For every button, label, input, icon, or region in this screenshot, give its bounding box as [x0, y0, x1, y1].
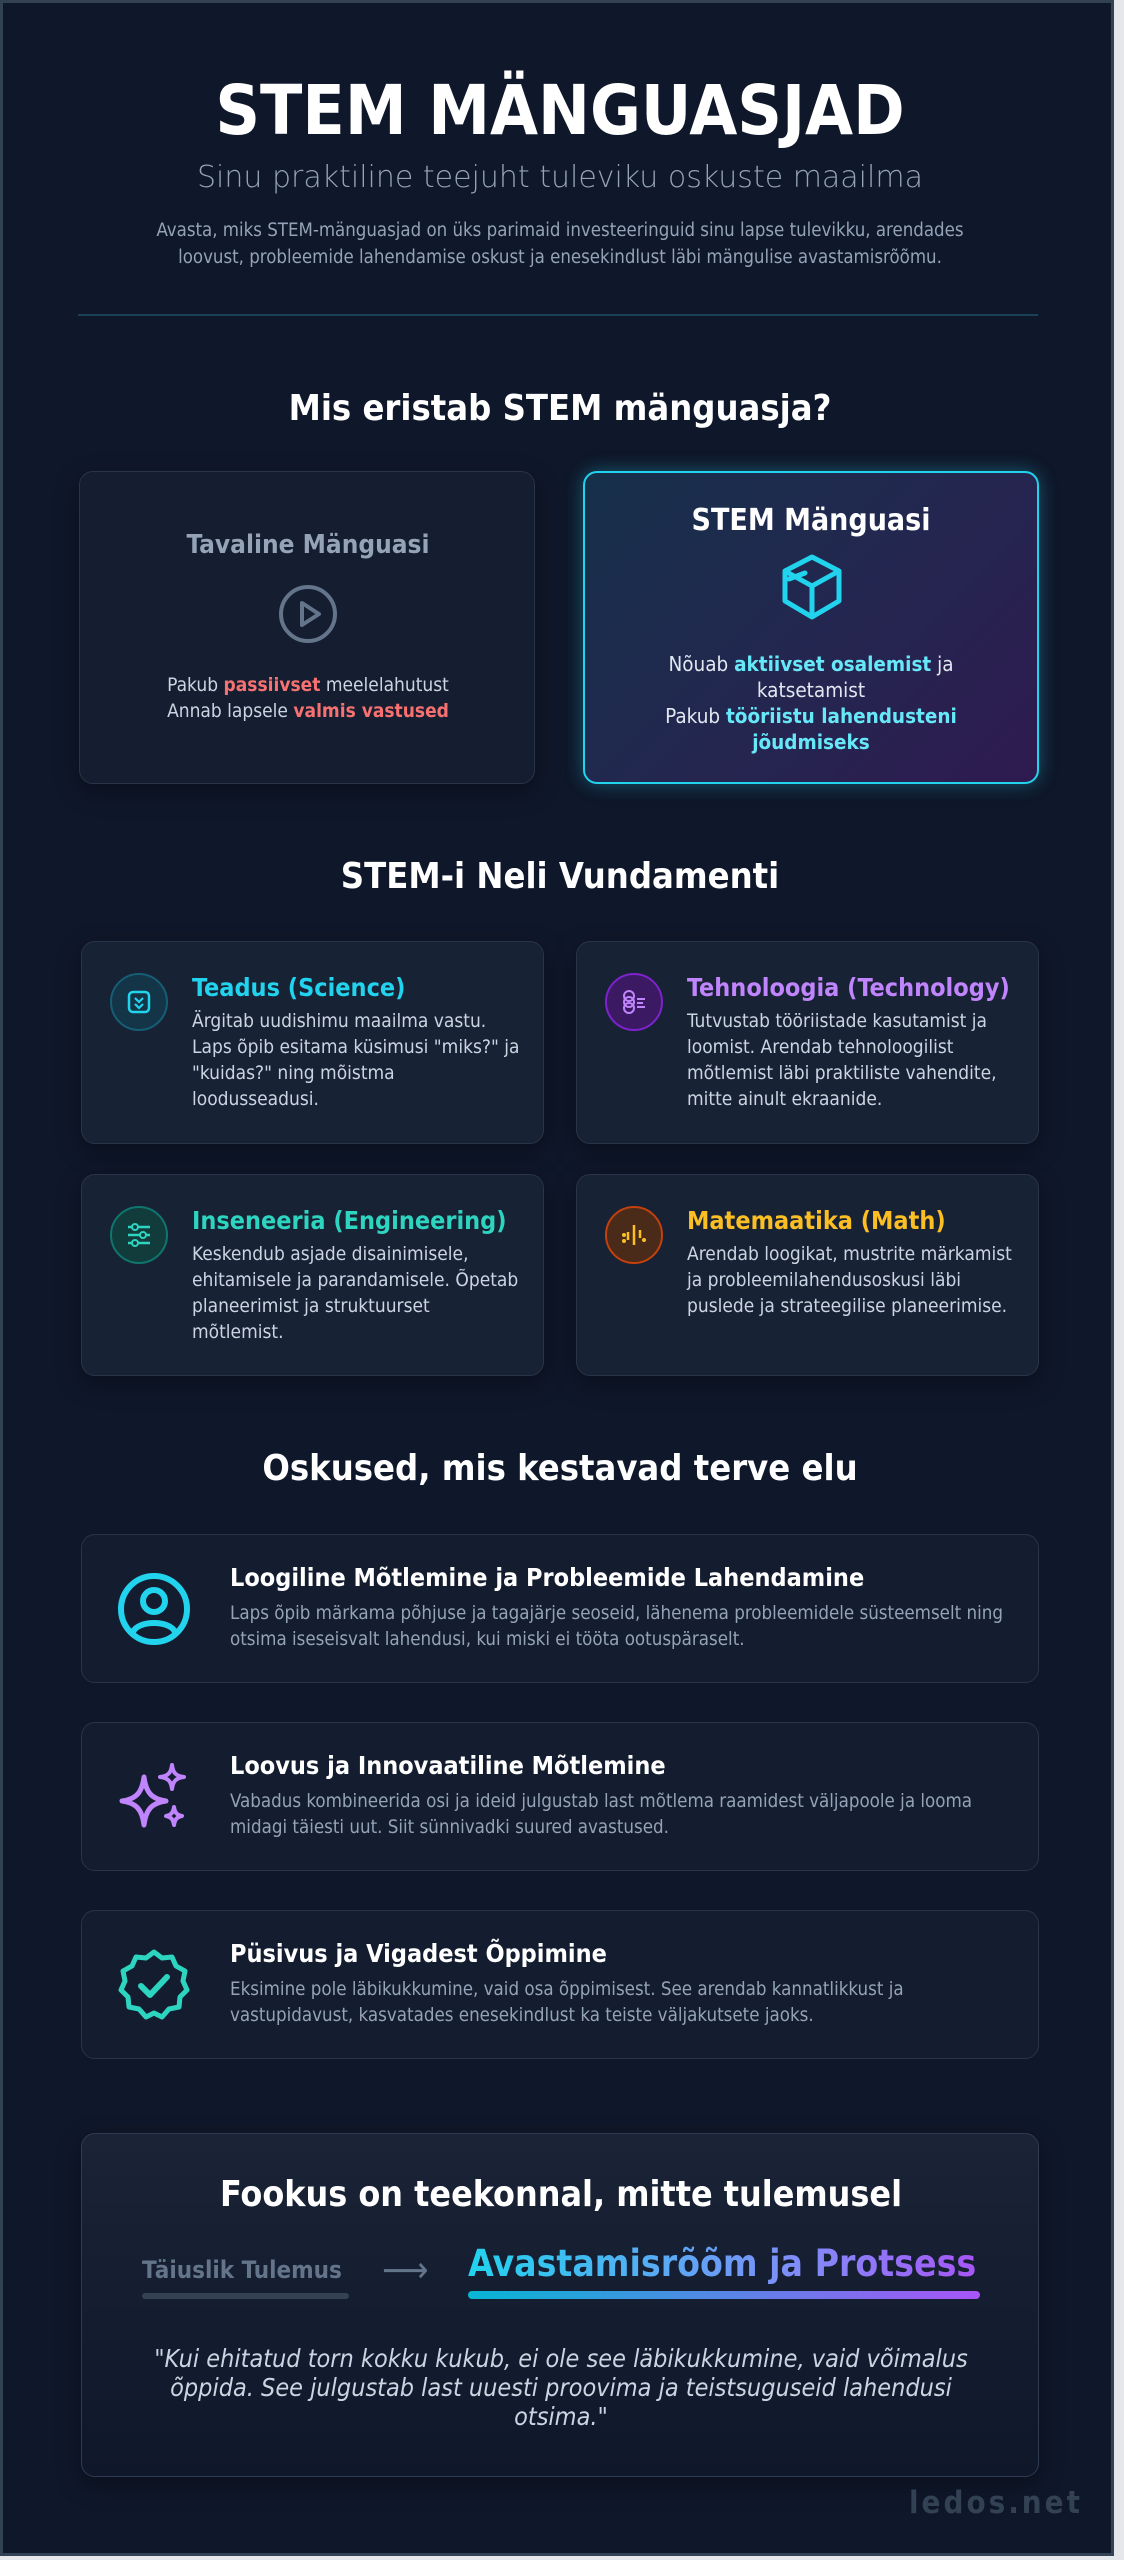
- panel: creativity: [81, 1722, 1039, 1871]
- text: regular toy: Pakub passiivset meelelahutust: [167, 674, 449, 696]
- icon: science: [110, 973, 168, 1031]
- panel: regular toy: [79, 471, 535, 784]
- text: regular toy: Annab lapsele valmis vastused: [167, 700, 449, 722]
- text: perseverance: Eksimine pole läbikukkumine, vaid osa õppimisest. See arendab kannatlikkust ja vastupidavust, kasvatades enesekindlust ka teiste väljakutsete jaoks.: [230, 1979, 904, 2026]
- quote: "Kui ehitatud torn kokku kukub, ei ole see läbikukkumine, vaid võimalus õppida. See julgustab last uuesti proovima ja teistsuguseid lahendusi otsima.": [154, 2344, 968, 2431]
- text: STEM toy: [665, 652, 957, 754]
- label: perfect result: Täiuslik Tulemus: [142, 2256, 342, 2284]
- title: science: Teadus (Science): [192, 973, 405, 1002]
- title: creativity: Loovus ja Innovaatiline Mõtlemine: [230, 1751, 666, 1780]
- panel: perseverance: [81, 1910, 1039, 2059]
- heading: regular toy: Tavaline Mänguasi: [187, 530, 429, 560]
- icon: technology: [605, 973, 663, 1031]
- heading: lifelong skills: Oskused, mis kestavad terve elu: [262, 1448, 858, 1489]
- icon: badge check: [118, 1950, 190, 2020]
- panel: STEM toy: [583, 471, 1039, 784]
- panel: math: [576, 1174, 1039, 1376]
- subtitle: Sinu praktiline teejuht tuleviku oskuste maailma: [197, 160, 923, 195]
- title: technology: Tehnoloogia (Technology): [687, 973, 1010, 1002]
- arrow: ⟶: [382, 2250, 428, 2291]
- label: joy of discovery: Avastamisrõõm ja Protsess: [468, 2242, 976, 2285]
- panel: technology: [576, 941, 1039, 1144]
- icon: cube: [782, 554, 842, 620]
- heading: foundations: STEM-i Neli Vundamenti: [341, 856, 779, 897]
- intro text: Avasta, miks STEM-mänguasjad on üks parimaid investeeringuid sinu lapse tulevikku, arendades loovust, probleemide lahendamise oskust ja enesekindlust läbi mängulise avastamisrõõmu.: [156, 220, 964, 268]
- panel: science: [81, 941, 544, 1144]
- heading: STEM toy: STEM Mänguasi: [692, 503, 930, 538]
- icon: math: [605, 1206, 663, 1264]
- panel: engineering: [81, 1174, 544, 1376]
- panel: focus on journey: [81, 2133, 1039, 2477]
- title: STEM MÄNGUASJAD: [215, 71, 905, 151]
- icon: engineering: [110, 1206, 168, 1264]
- text: STEM toy: Pakub tööriistu lahendusteni jõudmiseks: [665, 704, 957, 754]
- text: creativity: Vabadus kombineerida osi ja ideid julgustab last mõtlema raamidest väljapoole ja looma midagi täiesti uut. Siit sünnivadki suured avastused.: [230, 1791, 972, 1838]
- icon: user: [118, 1573, 190, 1645]
- text: regular toy: [167, 674, 449, 722]
- text: logical thinking: Laps õpib märkama põhjuse ja tagajärje seoseid, lähenema probleemidele süsteemselt ning otsima iseseisvalt lahendusi, kui miski ei tööta ootuspäraselt.: [230, 1603, 1003, 1650]
- heading: focus: Fookus on teekonnal, mitte tulemusel: [220, 2174, 902, 2215]
- panel: logical thinking: [81, 1534, 1039, 1683]
- text: engineering: Keskendub asjade disainimisele, ehitamisele ja parandamisele. Õpetab planeerimist ja struktuurset mõtlemist.: [192, 1243, 518, 1343]
- title: logical thinking: Loogiline Mõtlemine ja Probleemide Lahendamine: [230, 1563, 864, 1592]
- label: perfect result: [142, 2256, 349, 2299]
- text: STEM toy: Nõuab aktiivset osalemist ja katsetamist: [668, 652, 954, 702]
- text: science: Ärgitab uudishimu maailma vastu. Laps õpib esitama küsimusi "miks?" ja "kuidas?" ning mõistma loodusseadusi.: [192, 1010, 519, 1110]
- watermark: ledos.net: [909, 2485, 1083, 2521]
- title: math: Matemaatika (Math): [687, 1206, 946, 1235]
- title: perseverance: Püsivus ja Vigadest Õppimine: [230, 1939, 607, 1968]
- text: math: Arendab loogikat, mustrite märkamist ja probleemilahendusoskusi läbi puslede ja strateegilise planeerimise.: [687, 1243, 1012, 1317]
- icon: sparkles: [120, 1763, 186, 1828]
- heading: comparison: Mis eristab STEM mänguasja?: [289, 388, 831, 429]
- title: engineering: Inseneeria (Engineering): [192, 1206, 507, 1235]
- text: technology: Tutvustab tööriistade kasutamist ja loomist. Arendab tehnoloogilist mõtlemist läbi praktiliste vahendite, mitte ainult ekraanide.: [687, 1010, 997, 1110]
- icon: play: [279, 585, 337, 643]
